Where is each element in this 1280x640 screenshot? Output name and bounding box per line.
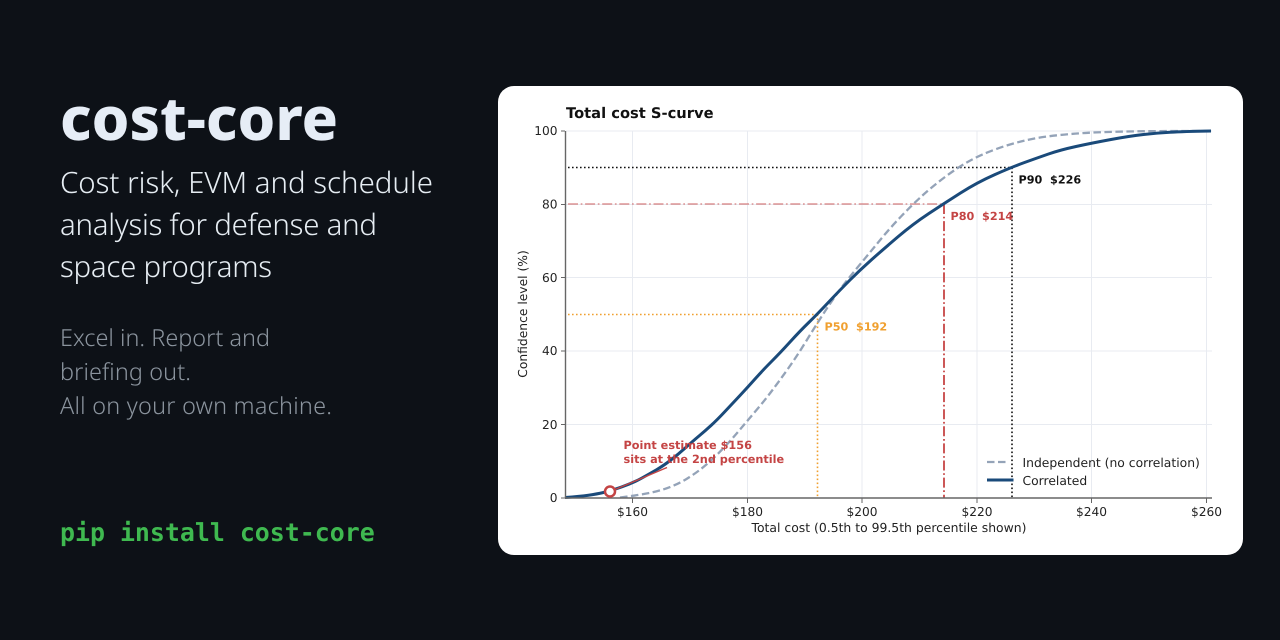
P90 marker lines [568, 168, 1012, 498]
subtitle [60, 162, 433, 286]
x axis tick labels: $180 [732, 505, 763, 519]
tagline [60, 321, 332, 421]
y axis tick labels: 100 [534, 124, 558, 138]
y axis tick labels: 0 [550, 491, 558, 505]
point estimate callout: Point estimate $156 [624, 439, 752, 452]
tagline: briefing out. [60, 355, 191, 387]
P50 label: P50 $192 [824, 320, 887, 334]
chart title: Total cost S-curve [566, 105, 714, 122]
y axis label: Confidence level (%) [516, 250, 530, 378]
independent curve [620, 131, 1211, 498]
subtitle: space programs [60, 246, 272, 286]
y axis tick labels: 80 [542, 198, 558, 212]
x axis tick labels [617, 505, 1222, 519]
tagline: Excel in. Report and [60, 321, 270, 353]
P50 marker lines [568, 314, 818, 498]
P80 label: P80 $214 [950, 210, 1013, 223]
x axis tick labels: $220 [961, 505, 993, 519]
x axis label: Total cost (0.5th to 99.5th percentile shown) [751, 520, 1026, 535]
y axis tick labels: 20 [542, 418, 558, 432]
x axis tick labels: $260 [1191, 505, 1222, 519]
legend: Correlated [1022, 474, 1087, 488]
y axis tick labels: 60 [542, 271, 558, 285]
install command: pip install cost-core [60, 518, 375, 547]
subtitle: Cost risk, EVM and schedule [60, 162, 433, 202]
point estimate callout [624, 439, 785, 466]
legend: Independent (no correlation) [1022, 456, 1200, 470]
tagline: All on your own machine. [60, 389, 332, 421]
P80 marker lines [568, 204, 944, 498]
point estimate arrow [614, 468, 667, 490]
x axis tick labels: $200 [846, 505, 878, 519]
point estimate callout: sits at the 2nd percentile [624, 453, 785, 466]
legend [987, 456, 1200, 488]
y axis tick labels [534, 124, 558, 505]
y axis tick labels: 40 [542, 344, 558, 358]
x axis tick labels: $240 [1076, 505, 1107, 519]
point estimate marker [605, 486, 615, 496]
panel: S-curve chart [498, 86, 1243, 555]
axes [561, 131, 1212, 503]
title: cost-core [60, 76, 338, 158]
P90 label: P90 $226 [1018, 174, 1081, 186]
x axis tick labels: $160 [617, 505, 648, 519]
correlated curve [565, 131, 1211, 498]
subtitle: analysis for defense and [60, 204, 377, 244]
